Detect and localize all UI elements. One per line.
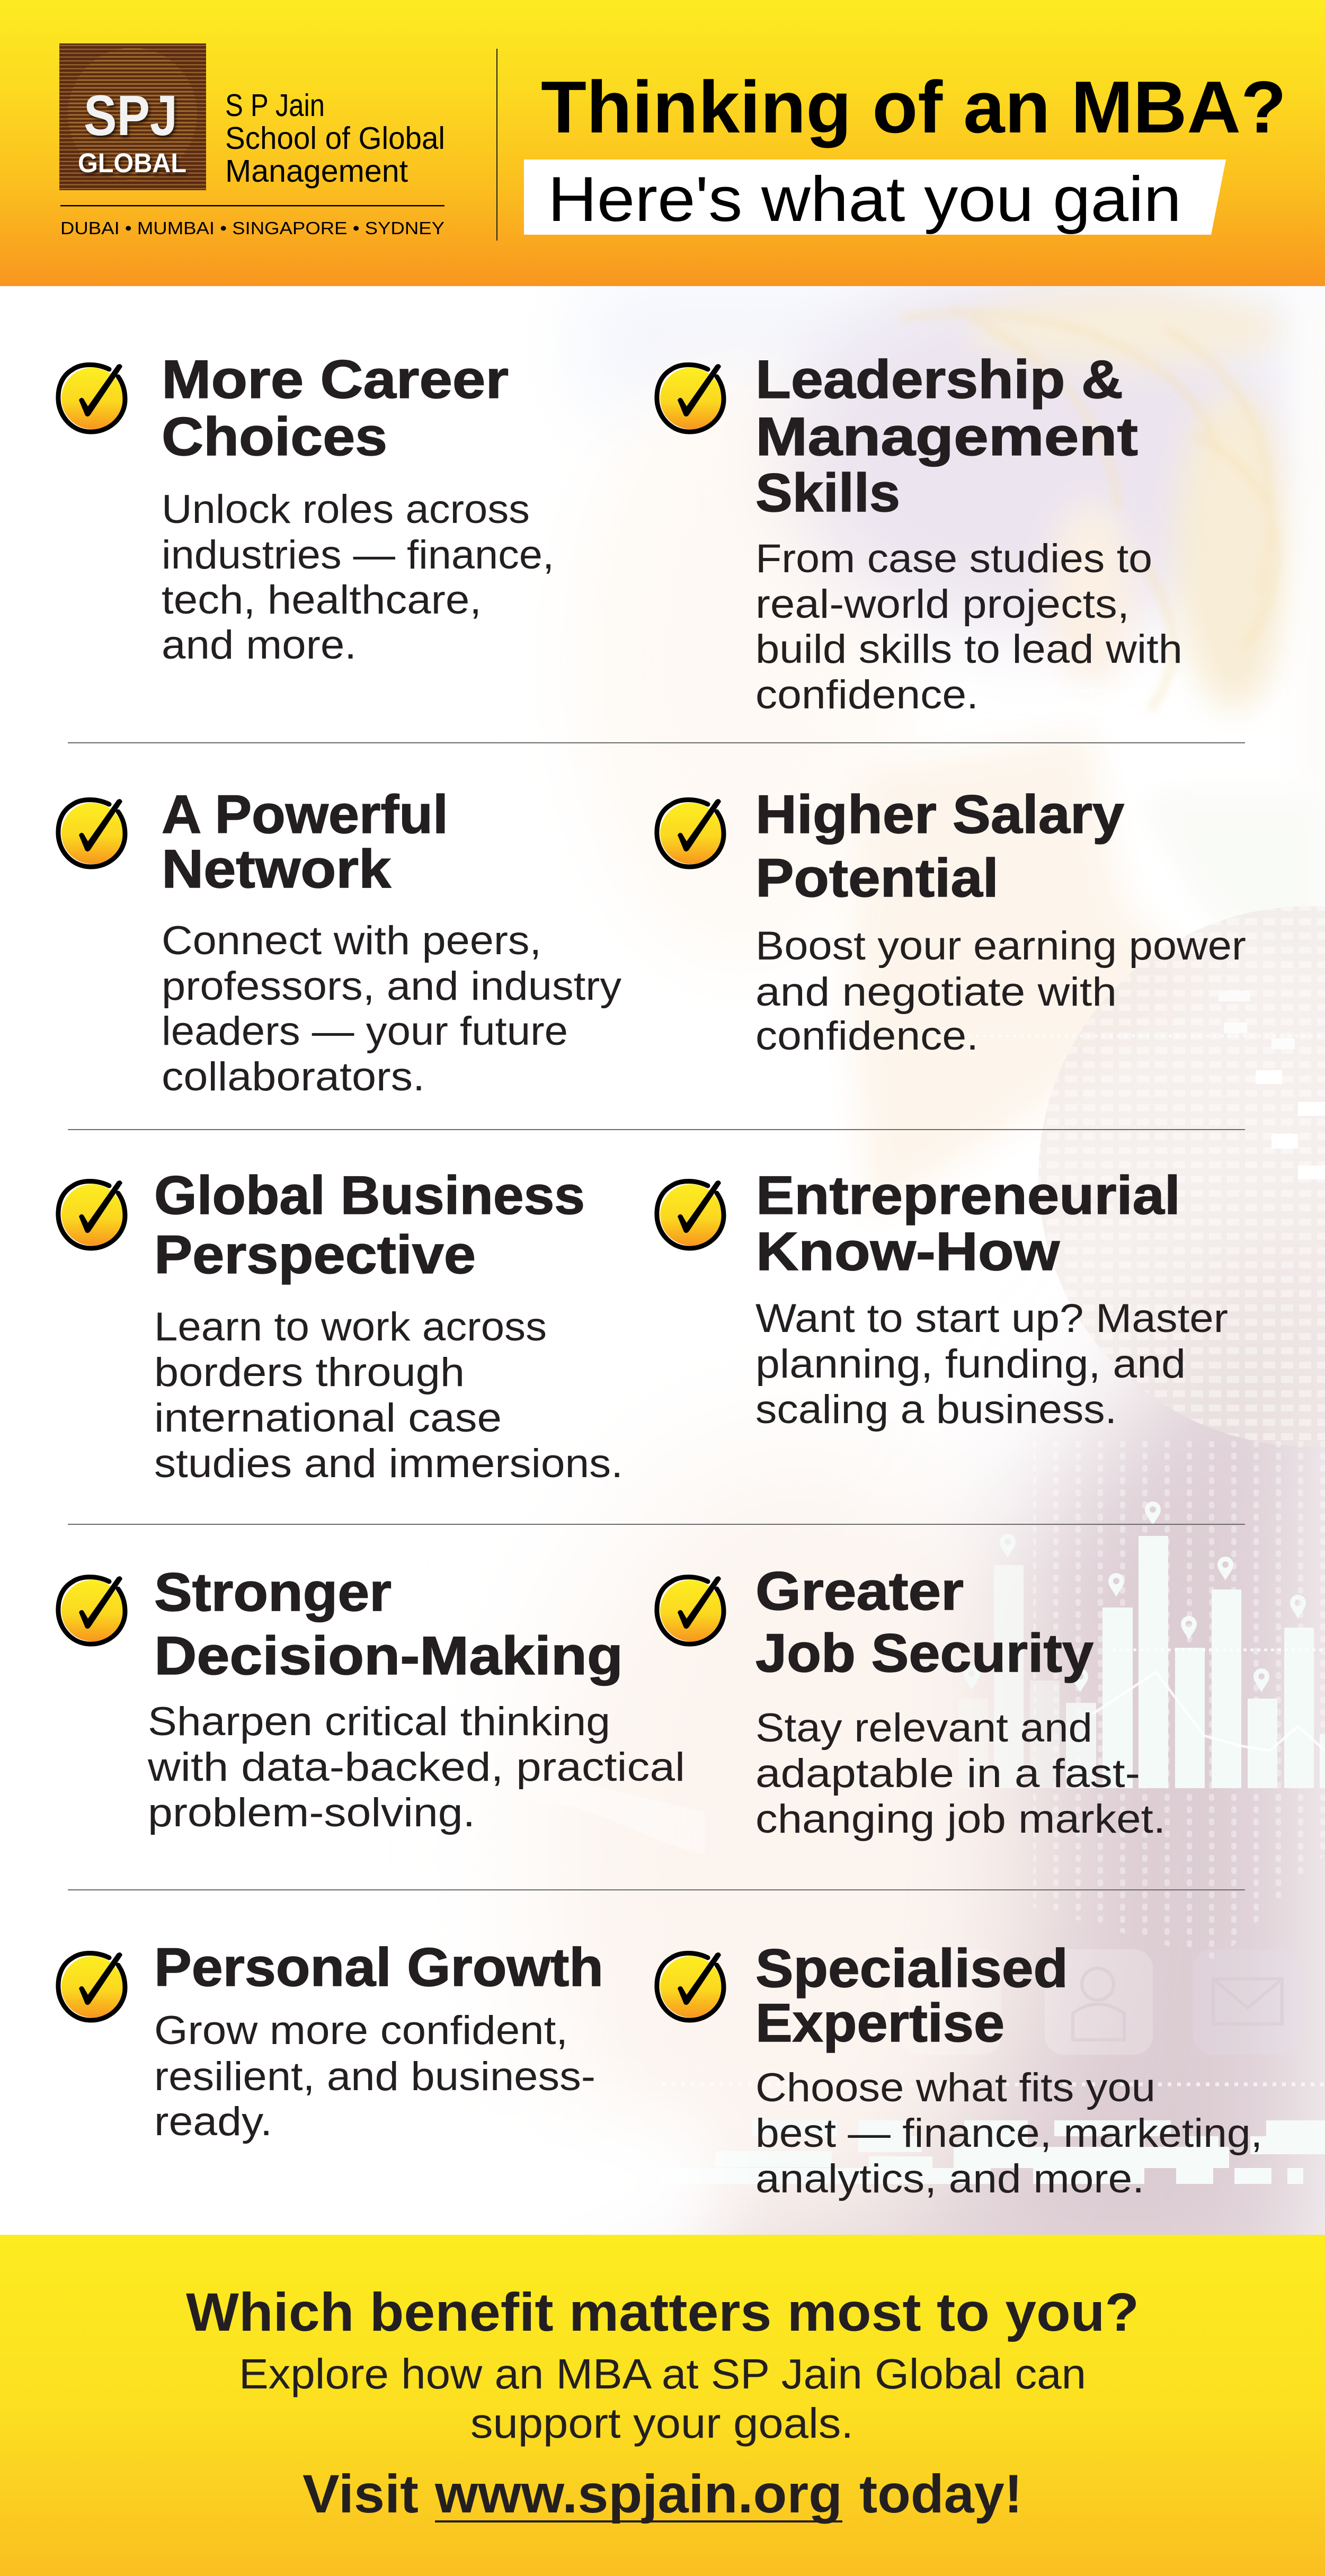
heading: Greater — [755, 1561, 964, 1621]
pixel band — [662, 2120, 1325, 2184]
body text: professors, and industry — [162, 964, 621, 1009]
heading: Higher Salary — [755, 784, 1124, 845]
body text — [162, 918, 621, 1099]
logo: SPJ Global badge: SPJ — [84, 83, 177, 147]
school name — [225, 88, 445, 189]
body text: ready. — [154, 2099, 272, 2144]
footer explanation: Explore how an MBA at SP Jain Global can — [239, 2350, 1086, 2397]
heading — [755, 1561, 1093, 1683]
icon: check — [657, 364, 724, 432]
heading — [755, 784, 1124, 908]
heading — [154, 1165, 585, 1285]
title: Thinking of an MBA? — [541, 66, 1286, 148]
body text: studies and immersions. — [154, 1441, 623, 1486]
heading: Global Business — [154, 1165, 585, 1225]
body text — [755, 923, 1246, 1059]
heading: Job Security — [755, 1623, 1093, 1683]
footer link line: Visit — [303, 2464, 419, 2524]
benefit: Leadership & Management Skills — [657, 349, 1182, 717]
heading: Choices — [162, 406, 387, 467]
benefit: More Career Choices — [58, 349, 554, 668]
heading: Skills — [755, 463, 900, 523]
heading: Expertise — [755, 1993, 1004, 2053]
body text: problem-solving. — [148, 1790, 475, 1835]
body text: Boost your earning power — [755, 923, 1246, 969]
globe — [1038, 901, 1325, 1446]
body text: changing job market. — [755, 1797, 1166, 1842]
footer explanation: support your goals. — [470, 2400, 853, 2447]
heading — [755, 1938, 1068, 2053]
heading: Specialised — [755, 1938, 1068, 1998]
body text: Grow more confident, — [154, 2008, 568, 2053]
heading — [154, 1562, 623, 1686]
heading: Decision-Making — [154, 1625, 623, 1686]
heading: Know-How — [756, 1221, 1060, 1282]
school name: Management — [225, 154, 408, 189]
footer link line: today! — [859, 2464, 1022, 2524]
footer explanation — [239, 2350, 1086, 2447]
heading: Entrepreneurial — [756, 1165, 1180, 1225]
body text: planning, funding, and — [755, 1342, 1186, 1387]
icon: check — [657, 1180, 724, 1248]
body text: collaborators. — [162, 1054, 425, 1099]
body text: international case — [154, 1396, 502, 1441]
benefit: Stronger Decision-Making — [58, 1562, 685, 1835]
bar chart — [958, 1502, 1325, 1788]
body text: Learn to work across — [154, 1304, 547, 1349]
icon: check — [58, 1576, 125, 1644]
logo: SPJ Global badge: GLOBAL — [78, 148, 186, 178]
body text — [755, 1706, 1166, 1842]
footer question: Which benefit matters most to you? — [186, 2282, 1139, 2342]
icon: check — [58, 1952, 125, 2020]
school name: School of Global — [225, 121, 445, 156]
body text — [154, 2008, 595, 2144]
faded background photo: woman, globe and bar chart — [547, 286, 1325, 2235]
icon: check — [657, 1952, 724, 2020]
body text: with data-backed, practical — [147, 1745, 685, 1790]
icon: check — [58, 1180, 125, 1248]
heading: Network — [162, 839, 391, 899]
heading — [162, 784, 448, 899]
benefit: Specialised Expertise — [657, 1938, 1262, 2201]
body text: scaling a business. — [755, 1387, 1117, 1432]
body text — [755, 536, 1182, 717]
heading — [162, 349, 509, 467]
body text: Choose what fits you — [755, 2065, 1155, 2110]
benefit: Entrepreneurial Know-How — [657, 1165, 1228, 1432]
heading: Management — [755, 406, 1138, 467]
body text — [154, 1304, 623, 1486]
heading: Potential — [755, 848, 999, 908]
footer call to action — [0, 2235, 1325, 2576]
icon: check — [657, 799, 724, 867]
icon: check — [58, 799, 125, 867]
benefit: Global Business Perspective — [58, 1165, 623, 1486]
heading: A Powerful — [162, 784, 448, 845]
body text: and more. — [162, 623, 357, 668]
campus cities: DUBAI • MUMBAI • SINGAPORE • SYDNEY — [60, 218, 444, 238]
body text: Connect with peers, — [162, 918, 541, 963]
body text: confidence. — [755, 1014, 979, 1059]
heading: Perspective — [154, 1224, 476, 1285]
body text: Sharpen critical thinking — [148, 1699, 610, 1744]
body text: best — finance, marketing, — [755, 2111, 1262, 2156]
heading — [755, 349, 1138, 523]
body text: Want to start up? Master — [755, 1296, 1228, 1341]
logo: SPJ Global badge — [59, 43, 206, 190]
heading: Leadership & — [755, 349, 1123, 410]
footer link line — [303, 2464, 1022, 2524]
body text: build skills to lead with — [755, 627, 1182, 672]
dot columns — [1033, 1441, 1325, 1960]
dividers — [68, 742, 1245, 743]
body text: confidence. — [755, 672, 979, 717]
icon: check — [657, 1576, 724, 1644]
body text: real-world projects, — [755, 582, 1130, 627]
subtitle banner: Here's what you gain — [548, 164, 1181, 235]
body text — [755, 1296, 1228, 1432]
benefit: Greater Job Security — [657, 1561, 1166, 1842]
body text: adaptable in a fast- — [755, 1751, 1140, 1796]
body text: tech, healthcare, — [162, 578, 482, 623]
benefit: A Powerful Network — [58, 784, 621, 1099]
body text: resilient, and business- — [154, 2054, 595, 2099]
body text: From case studies to — [755, 536, 1152, 581]
body text: leaders — your future — [162, 1009, 568, 1054]
body text — [147, 1699, 685, 1835]
heading: More Career — [162, 349, 509, 410]
benefit: Personal Growth — [58, 1937, 603, 2144]
school name: S P Jain — [225, 88, 325, 123]
heading: Personal Growth — [154, 1937, 603, 1997]
faint app icons — [901, 1949, 1299, 2055]
body text: industries — finance, — [162, 532, 554, 578]
body text — [162, 487, 554, 668]
body text: analytics, and more. — [755, 2156, 1144, 2201]
header band — [0, 0, 1325, 286]
heading — [756, 1165, 1180, 1282]
body text: and negotiate with — [755, 970, 1117, 1015]
benefit: Higher Salary Potential — [657, 784, 1246, 1059]
body text: borders through — [154, 1350, 465, 1395]
icon: check — [58, 364, 125, 432]
footer link line: www.spjain.org — [434, 2464, 842, 2524]
body text: Stay relevant and — [755, 1706, 1092, 1751]
body text: Unlock roles across — [162, 487, 530, 532]
body text — [755, 2065, 1262, 2201]
heading: Stronger — [154, 1562, 392, 1622]
